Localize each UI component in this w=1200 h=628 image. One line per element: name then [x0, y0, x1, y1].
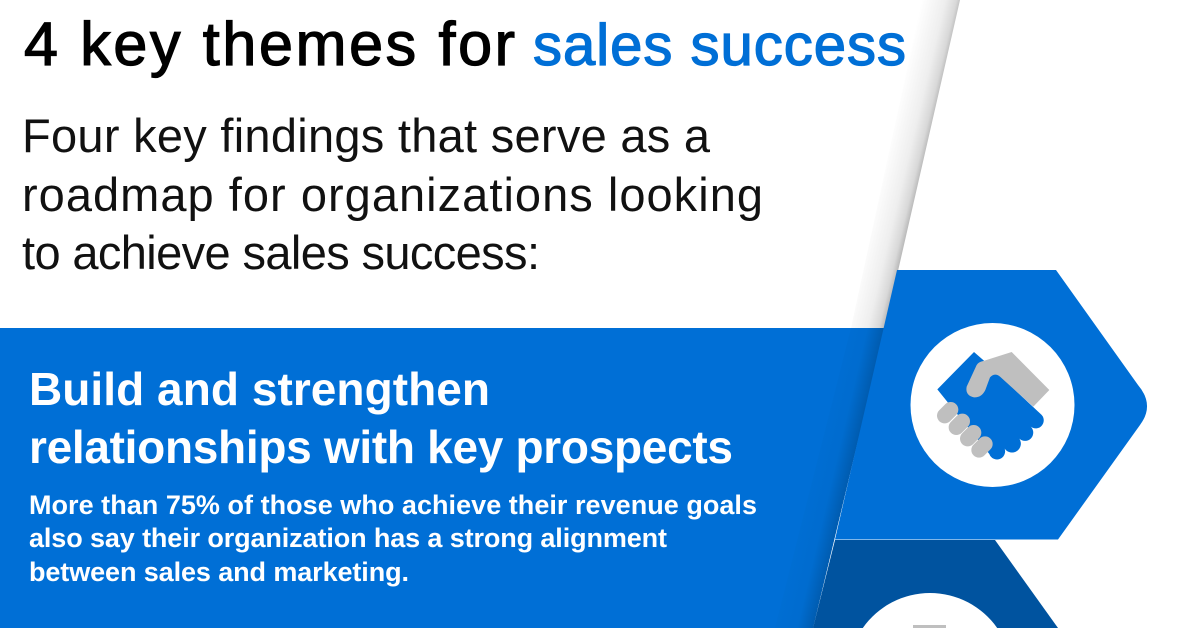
title	[24, 10, 906, 78]
panel: blue banner	[0, 328, 885, 628]
icon: gray fingers	[945, 410, 985, 450]
intro text: to achieve sales success:	[22, 226, 540, 279]
heading: build and strengthen relationships: relationships with key prospects	[29, 421, 733, 473]
icon: gray hand	[966, 352, 1049, 407]
body text: between sales and marketing.	[29, 557, 409, 587]
panel: blue hexagon	[835, 270, 1147, 540]
intro text: roadmap for organizations looking	[22, 168, 763, 221]
panel: dark blue hexagon	[813, 540, 1058, 628]
intro text: Four key findings that serve as a	[22, 109, 711, 162]
heading: build and strengthen relationships: Build and strengthen	[29, 363, 490, 415]
icon: dark hexagon circle	[863, 593, 997, 628]
heading: build and strengthen relationships	[29, 363, 733, 473]
icon: handshake	[937, 352, 1049, 459]
fold shadow	[851, 0, 960, 328]
title: sales success	[533, 13, 906, 78]
icon: white circle with handshake	[910, 323, 1074, 487]
intro text	[22, 109, 763, 279]
body text	[29, 490, 757, 587]
icon: blue hand	[937, 352, 1044, 459]
title: 4 key themes for	[24, 10, 515, 78]
body text: also say their organization has a strong alignment	[29, 523, 667, 553]
body text: More than 75% of those who achieve their revenue goals	[29, 490, 757, 520]
